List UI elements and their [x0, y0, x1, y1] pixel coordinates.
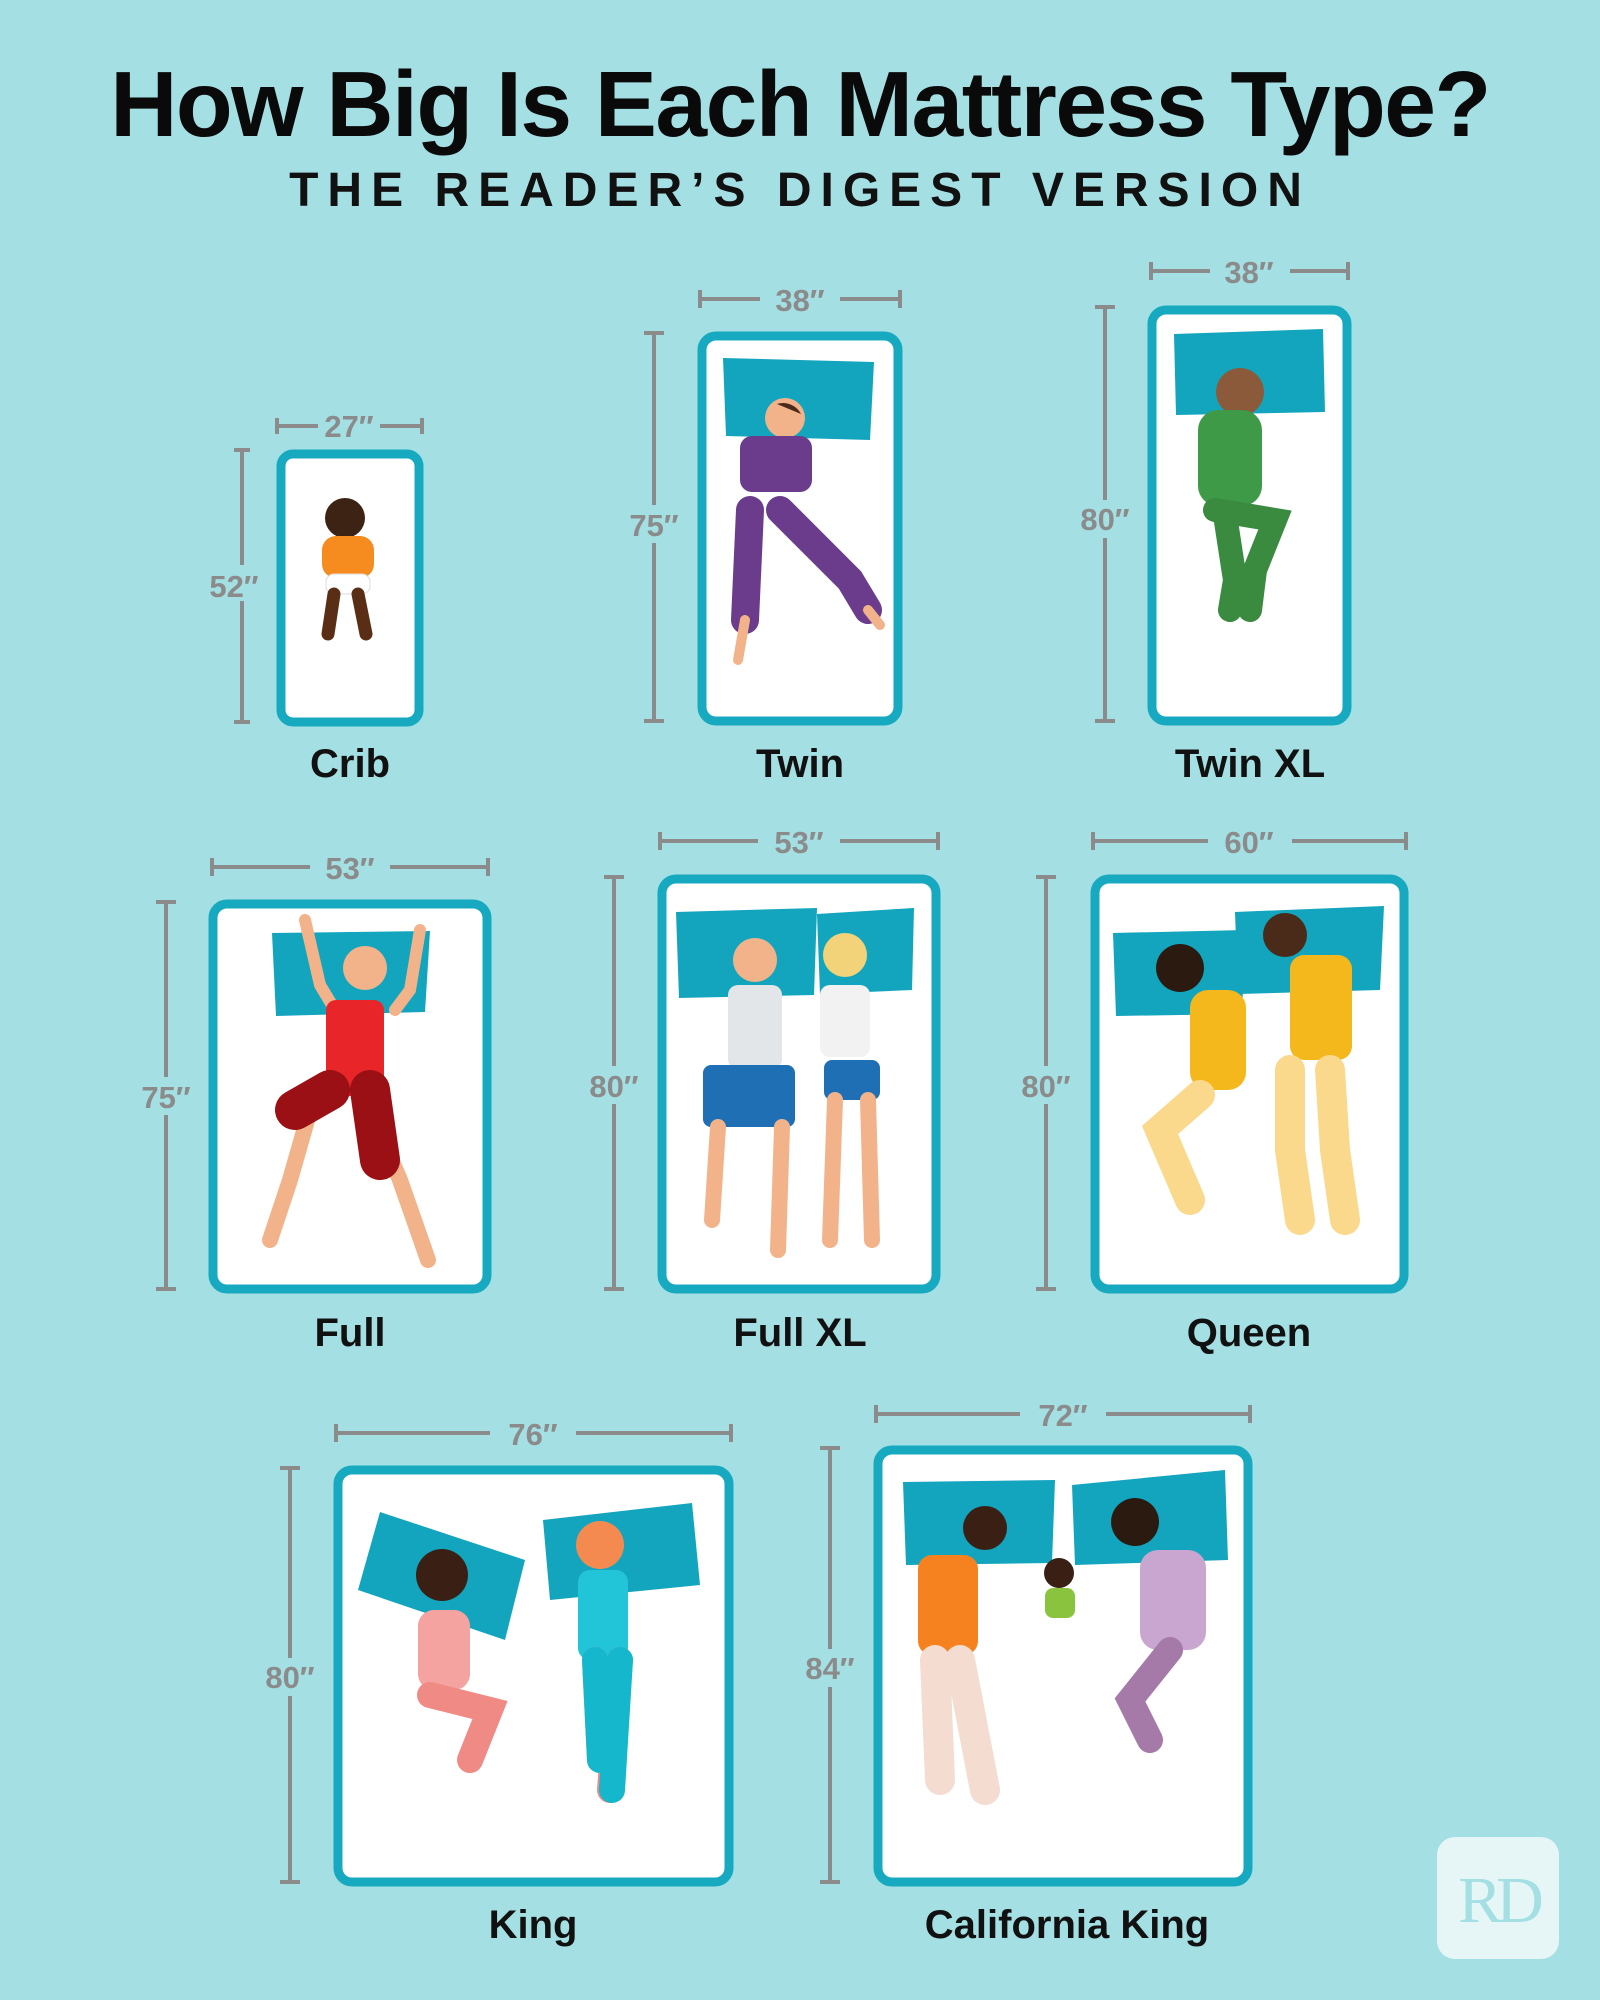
mattress: crib: 27″	[324, 409, 374, 444]
icon: twin xl pillow + person	[1174, 329, 1325, 610]
icon: full xl pillows + couple	[676, 908, 914, 1250]
logo: RD: RD	[1458, 1864, 1542, 1937]
mattress: full xl	[572, 822, 938, 1355]
mattress: queen	[1004, 822, 1406, 1355]
mattress: king	[248, 1414, 731, 1947]
mattress: queen: 80″	[1021, 1069, 1071, 1104]
title: How Big Is Each Mattress Type?	[110, 52, 1490, 156]
mattress: queen: Queen	[1187, 1311, 1311, 1355]
mattress: full: 53″	[325, 851, 375, 886]
mattress: queen: 60″	[1224, 825, 1274, 860]
mattress: full xl: 53″	[774, 825, 824, 860]
icon: twin pillow + person	[723, 358, 880, 660]
mattress: california king	[788, 1395, 1250, 1947]
mattress: twin: 75″	[629, 508, 679, 543]
mattress: california king: 72″	[1038, 1398, 1088, 1433]
mattress: twin xl: 38″	[1224, 255, 1274, 290]
subtitle: THE READER’S DIGEST VERSION	[289, 164, 1311, 217]
mattress: crib	[200, 406, 422, 786]
mattress: twin xl: 80″	[1080, 502, 1130, 537]
mattress: twin	[612, 280, 900, 786]
mattress: full: 75″	[141, 1080, 191, 1115]
mattress: crib: Crib	[310, 742, 390, 786]
icon: queen pillows + couple	[1113, 906, 1384, 1220]
mattress: twin: 38″	[775, 283, 825, 318]
mattress: king: 80″	[265, 1660, 315, 1695]
logo: RD	[1437, 1837, 1559, 1959]
mattress: king: King	[489, 1903, 577, 1947]
mattress: california king: California King	[925, 1903, 1209, 1947]
mattress: twin: Twin	[756, 742, 844, 786]
mattress: full xl: 80″	[589, 1069, 639, 1104]
mattress: king: 76″	[508, 1417, 558, 1452]
mattress: california king: 84″	[805, 1651, 855, 1686]
icon: king pillows + couple	[358, 1503, 700, 1790]
mattress: twin xl	[1062, 252, 1348, 786]
icon: cal king pillows + family	[903, 1470, 1228, 1790]
mattress: twin xl: Twin XL	[1175, 742, 1325, 786]
mattress: crib: 52″	[209, 569, 259, 604]
icon: full pillow + person	[270, 920, 430, 1260]
icon: baby	[322, 498, 374, 634]
mattress: full	[124, 848, 488, 1355]
mattress: full: Full	[314, 1311, 386, 1355]
mattress: full xl: Full XL	[733, 1311, 867, 1355]
